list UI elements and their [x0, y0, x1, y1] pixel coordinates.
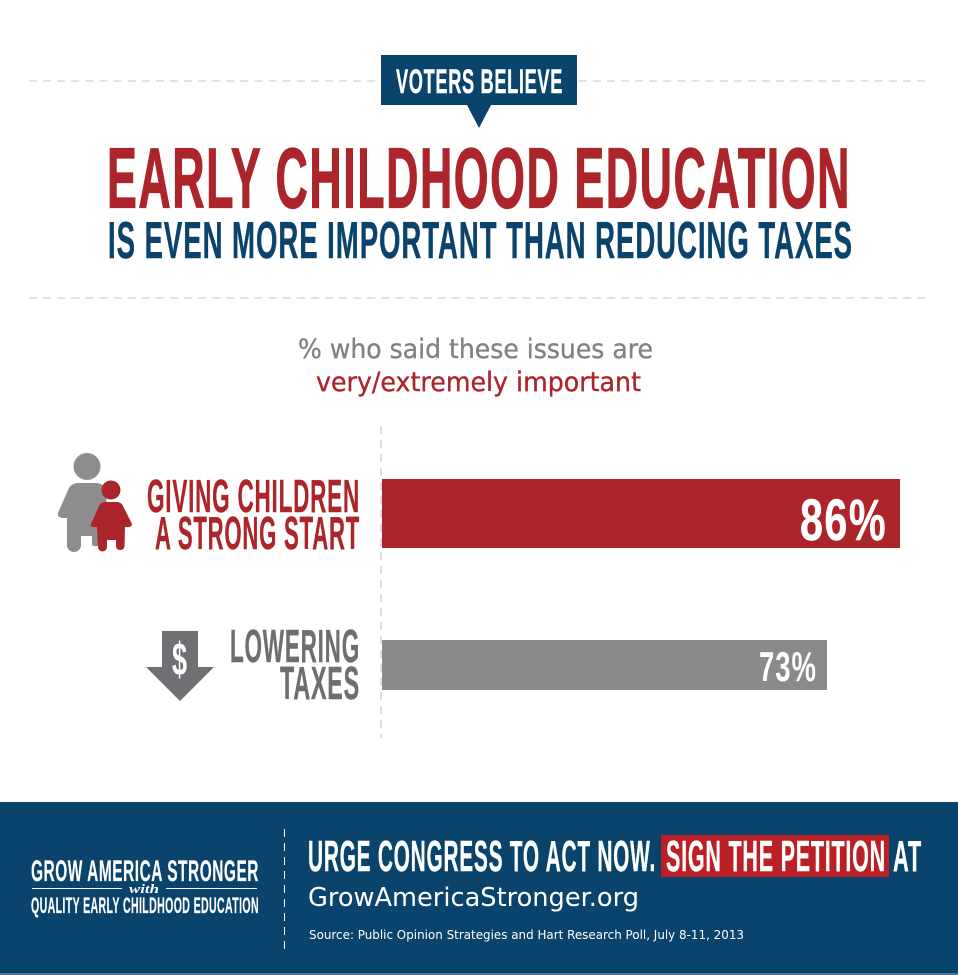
callout: voters believe — [381, 55, 577, 128]
infographic canvas: GIVING CHILDREN — [147, 470, 360, 522]
chart heading — [298, 334, 653, 398]
panel: footer: QUALITY EARLY CHILDHOOD EDUCATION — [31, 893, 259, 918]
infographic canvas: A STRONG START — [155, 507, 360, 559]
bar: lowering taxes 73%: 73% — [759, 643, 817, 690]
icon: adult and child — [58, 453, 132, 552]
label: lowering taxes — [230, 620, 360, 709]
bar chart — [381, 426, 900, 738]
logo: grow america stronger: GROW AMERICA STRONGER — [31, 855, 259, 888]
website url: GrowAmericaStronger.org — [308, 883, 639, 913]
logo: grow america stronger — [31, 855, 259, 918]
label: giving children a strong start — [147, 470, 360, 559]
label: lowering taxes: TAXES — [280, 657, 360, 709]
icon: down arrow with dollar: $ — [172, 633, 188, 685]
callout: voters believe: VOTERS BELIEVE — [396, 63, 563, 101]
icon: down arrow with dollar — [146, 631, 214, 701]
panel: footer: AT — [893, 832, 922, 881]
bar: giving children 86% — [382, 479, 900, 553]
chart heading: % who said these issues are — [298, 334, 653, 365]
bar: lowering taxes 73% — [382, 640, 827, 690]
bar: giving children 86%: 86% — [800, 488, 887, 553]
source note: Source: Public Opinion Strategies and Hart Research Poll, July 8-11, 2013 — [309, 928, 744, 942]
panel: footer — [0, 802, 958, 975]
title — [107, 132, 853, 270]
logo: grow america stronger: with — [129, 881, 159, 896]
infographic canvas: LOWERING — [230, 620, 360, 672]
chart heading: very/extremely important — [316, 367, 641, 398]
